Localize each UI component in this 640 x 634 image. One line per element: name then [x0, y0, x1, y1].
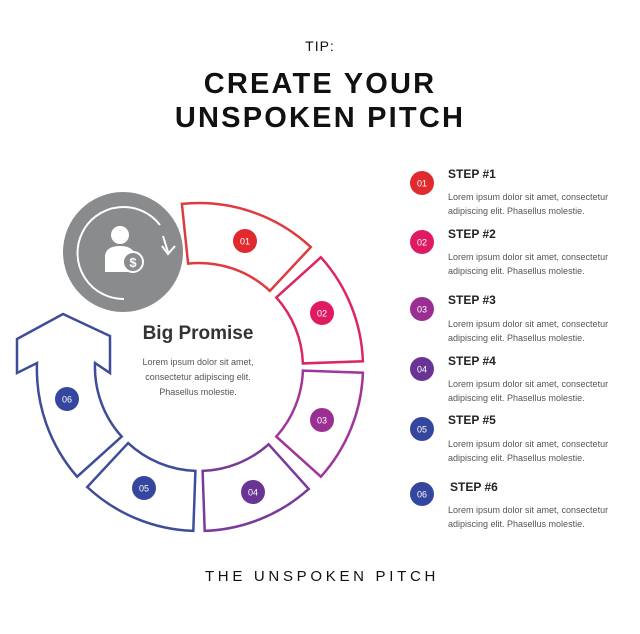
step 4: adipiscing elit. Phasellus molestie.: [448, 393, 585, 403]
segment 01: [182, 203, 311, 291]
step 2: STEP #2: [448, 227, 496, 241]
step 3: 03: [417, 304, 427, 314]
step 6: [410, 480, 608, 529]
step 3: Lorem ipsum dolor sit amet, consectetur: [448, 319, 608, 329]
icon: person with dollar in gray circle: [63, 192, 183, 312]
segment 02: [276, 257, 363, 363]
center text: Big Promise: Lorem ipsum dolor sit amet,: [142, 357, 254, 367]
step 5: 05: [417, 424, 427, 434]
tip label: TIP:: [305, 38, 335, 54]
step 5: adipiscing elit. Phasellus molestie.: [448, 453, 585, 463]
title: [175, 68, 465, 134]
step 4: STEP #4: [448, 354, 496, 368]
center text: Big Promise: consectetur adipiscing elit.: [145, 372, 251, 382]
segment 06 arrow: [17, 314, 122, 477]
segment 03: [276, 371, 363, 477]
center text: Big Promise: Phasellus molestie.: [159, 387, 237, 397]
step 1: [410, 167, 608, 216]
cycle diagram: [17, 203, 363, 531]
step 1: STEP #1: [448, 167, 496, 181]
step 6: Lorem ipsum dolor sit amet, consectetur: [448, 505, 608, 515]
segment 03: 03: [317, 416, 327, 426]
step 2: 02: [417, 238, 427, 248]
segment 05: 05: [139, 484, 149, 494]
step 3: adipiscing elit. Phasellus molestie.: [448, 333, 585, 343]
icon: person with dollar in gray circle: $: [129, 255, 137, 270]
step 5: [410, 413, 608, 463]
segment 04: 04: [248, 488, 258, 498]
step 1: 01: [417, 178, 427, 188]
segment 04: [203, 444, 309, 531]
step 6: 06: [417, 490, 427, 500]
center text: Big Promise: [142, 323, 254, 397]
footer brand: THE UNSPOKEN PITCH: [205, 568, 439, 585]
step 6: STEP #6: [450, 480, 498, 494]
step 4: [410, 354, 608, 403]
step 2: Lorem ipsum dolor sit amet, consectetur: [448, 252, 608, 262]
step 1: Lorem ipsum dolor sit amet, consectetur: [448, 192, 608, 202]
step 1: adipiscing elit. Phasellus molestie.: [448, 206, 585, 216]
segment 02: 02: [317, 308, 327, 318]
segment 05: [87, 443, 195, 531]
title: CREATE YOUR: [204, 68, 436, 100]
step 3: STEP #3: [448, 293, 496, 307]
step 3: [410, 293, 608, 343]
step 2: [410, 227, 608, 276]
steps list: [410, 167, 608, 529]
step 4: Lorem ipsum dolor sit amet, consectetur: [448, 379, 608, 389]
title: UNSPOKEN PITCH: [175, 102, 465, 134]
step 5: Lorem ipsum dolor sit amet, consectetur: [448, 439, 608, 449]
step 6: adipiscing elit. Phasellus molestie.: [448, 519, 585, 529]
step 2: adipiscing elit. Phasellus molestie.: [448, 266, 585, 276]
center text: Big Promise: Big Promise: [143, 323, 253, 344]
segment 01: 01: [240, 236, 250, 246]
step 4: 04: [417, 364, 427, 374]
segment 06 arrow: 06: [62, 394, 72, 404]
step 5: STEP #5: [448, 413, 496, 427]
